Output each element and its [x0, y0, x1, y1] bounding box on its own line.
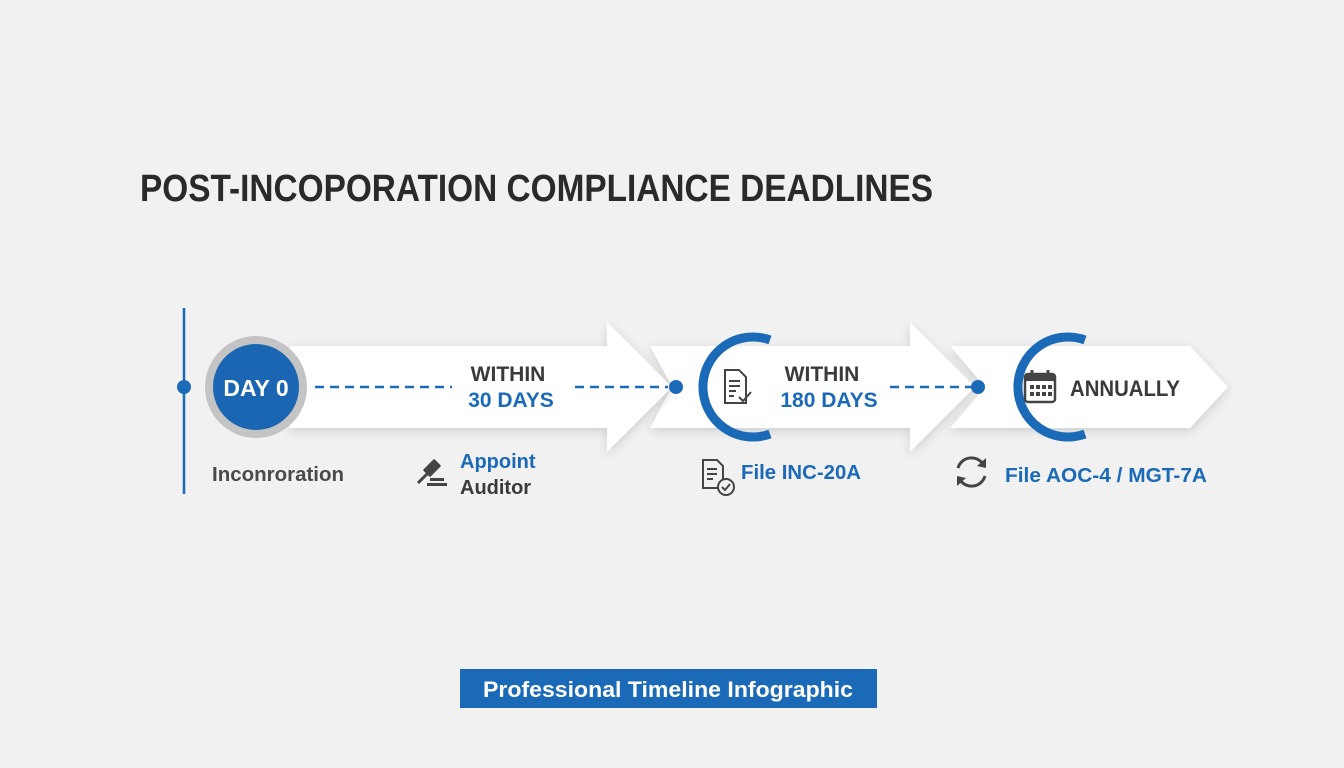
caption: appoint auditor: [418, 451, 536, 499]
timeline: [177, 308, 1228, 494]
title: POST-INCOPORATION COMPLIANCE DEADLINES: [140, 168, 933, 210]
footer badge: Professional Timeline Infographic: [483, 677, 853, 702]
icon: gavel: [418, 459, 447, 486]
node 2: [669, 337, 878, 437]
caption: file aoc-4: [957, 458, 1207, 487]
caption: file aoc-4: File AOC-4 / MGT-7A: [1005, 465, 1207, 487]
label: within 30 days: WITHIN: [471, 363, 545, 386]
node 2: 180 DAYS: [780, 389, 878, 412]
caption: incorporation: Inconroration: [212, 464, 344, 486]
arrow 2: [650, 322, 975, 452]
icon: calendar: [1025, 370, 1055, 402]
icon: document check: [725, 370, 751, 403]
label: within 30 days: 30 DAYS: [468, 389, 554, 412]
day 0 circle: DAY 0: [223, 375, 289, 401]
footer badge: [460, 669, 877, 708]
icon: refresh: [957, 458, 986, 486]
label: within 30 days: [468, 363, 554, 412]
dashes: [315, 386, 972, 388]
caption: file inc-20a: File INC-20A: [741, 462, 861, 484]
arrow 1: [290, 322, 672, 452]
arrow 3: [950, 346, 1228, 428]
caption: appoint auditor: Appoint: [460, 451, 536, 473]
caption: appoint auditor: Auditor: [460, 477, 531, 499]
node 3: [971, 337, 1180, 437]
node 2: WITHIN: [785, 363, 859, 386]
node 3: ANNUALLY: [1070, 376, 1180, 401]
day 0 circle: [205, 336, 307, 438]
start line: [183, 308, 185, 494]
caption: file inc-20a: [703, 460, 861, 495]
